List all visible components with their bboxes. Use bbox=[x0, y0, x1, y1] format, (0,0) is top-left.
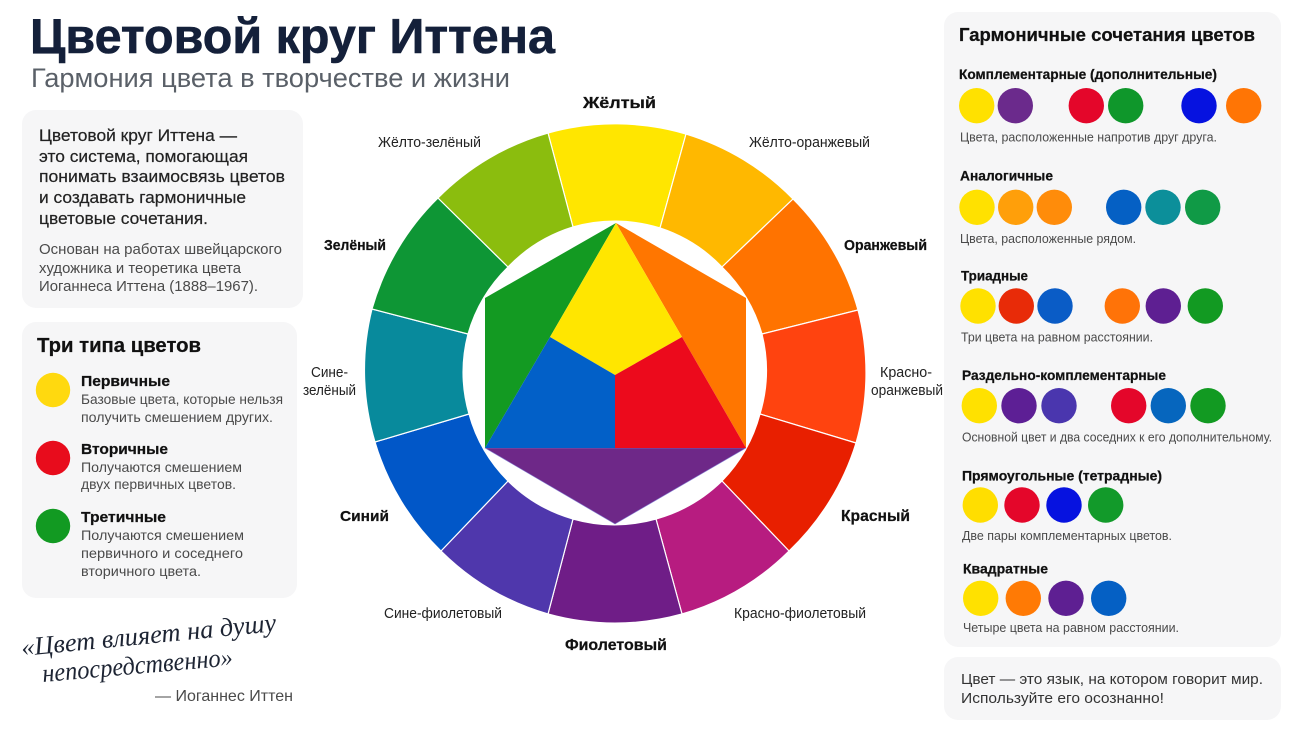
icon: primary dot bbox=[36, 373, 70, 407]
split-complementary scheme: Основной цвет и два соседних к его дополнительному. bbox=[962, 430, 1272, 445]
shape: orange secondary bbox=[616, 223, 746, 448]
label: red-orange: оранжевый bbox=[871, 383, 943, 399]
segment: blue-green bbox=[364, 309, 469, 442]
primary colours text bbox=[81, 373, 283, 425]
shape: blue primary bbox=[485, 337, 615, 448]
label: blue-green: зелёный bbox=[303, 383, 356, 399]
quote: непосредственно» bbox=[41, 642, 234, 688]
square scheme: Квадратные bbox=[963, 560, 1048, 576]
label: orange: Оранжевый bbox=[844, 238, 927, 254]
panel: harmonious combinations bbox=[944, 12, 1281, 647]
tertiary colours text: Третичные bbox=[81, 509, 166, 526]
split-complementary scheme: Раздельно-комплементарные bbox=[962, 367, 1166, 383]
label: yellow-orange: Жёлто-оранжевый bbox=[749, 135, 870, 151]
triadic scheme: Триадные bbox=[961, 268, 1028, 284]
intro secondary text: художника и теоретика цвета bbox=[39, 261, 242, 277]
primary colours text: Базовые цвета, которые нельзя bbox=[81, 391, 283, 407]
label: yellow: Жёлтый bbox=[582, 95, 656, 112]
tertiary colours text: вторичного цвета. bbox=[81, 563, 201, 579]
label: blue-green: Сине- bbox=[311, 365, 348, 381]
segment: blue-violet bbox=[441, 481, 573, 614]
intro lead text: понимать взаимосвязь цветов bbox=[39, 168, 285, 186]
segment: red-orange bbox=[760, 310, 866, 443]
secondary colours text: Получаются смешением bbox=[81, 459, 242, 475]
heading: three types: Три типа цветов bbox=[37, 334, 201, 357]
secondary colours text bbox=[81, 441, 242, 492]
tetradic scheme bbox=[962, 468, 1172, 543]
shape: violet secondary bbox=[485, 448, 746, 524]
closing text bbox=[961, 671, 1263, 707]
subtitle: Гармония цвета в творчестве и жизни bbox=[31, 63, 510, 93]
square scheme bbox=[963, 560, 1179, 635]
label: red: Красный bbox=[841, 508, 910, 525]
complementary scheme: Цвета, расположенные напротив друг друга. bbox=[960, 130, 1217, 144]
analogous scheme: Аналогичные bbox=[960, 168, 1053, 184]
heading: combinations: Гармоничные сочетания цветов bbox=[959, 24, 1255, 45]
intro lead text: это система, помогающая bbox=[39, 148, 248, 166]
icon: secondary dot bbox=[36, 441, 70, 475]
label: blue: Синий bbox=[340, 508, 389, 525]
shape: yellow primary bbox=[550, 223, 682, 375]
shape: green secondary bbox=[485, 223, 616, 448]
tertiary colours text bbox=[81, 509, 244, 579]
colour wheel: 12-part ring bbox=[364, 124, 866, 623]
segment: green bbox=[372, 198, 508, 334]
tertiary colours text: первичного и соседнего bbox=[81, 545, 243, 561]
wheel labels bbox=[303, 95, 943, 654]
segment: red-violet bbox=[656, 481, 789, 614]
colour wheel: central triangles and hexagon bbox=[485, 223, 746, 524]
tetradic scheme: Две пары комплементарных цветов. bbox=[962, 528, 1172, 543]
title: Цветовой круг Иттена bbox=[30, 10, 556, 64]
segment: orange bbox=[722, 199, 858, 334]
quote attribution: — Иоганнес Иттен bbox=[155, 688, 293, 705]
segment: yellow-orange bbox=[660, 134, 793, 267]
label: red-violet: Красно-фиолетовый bbox=[734, 606, 866, 622]
triadic scheme bbox=[960, 268, 1223, 345]
analogous scheme bbox=[959, 168, 1220, 246]
tertiary colours text: Получаются смешением bbox=[81, 527, 244, 543]
label: red-orange: Красно- bbox=[880, 365, 932, 381]
tetradic scheme: Прямоугольные (тетрадные) bbox=[962, 468, 1162, 484]
segment: violet bbox=[548, 519, 682, 623]
segment: blue bbox=[375, 414, 508, 551]
intro lead text: и создавать гармоничные bbox=[39, 189, 246, 207]
split-complementary scheme bbox=[962, 367, 1272, 445]
icon: tertiary dot bbox=[36, 509, 70, 543]
intro secondary text: Основан на работах швейцарского bbox=[39, 242, 282, 258]
label: green: Зелёный bbox=[324, 238, 386, 254]
panel: closing note bbox=[944, 657, 1281, 720]
segment: red bbox=[722, 414, 856, 551]
label: red-orange bbox=[871, 365, 943, 399]
panel: three colour types bbox=[22, 322, 297, 598]
intro lead text bbox=[39, 127, 285, 228]
intro lead text: цветовые сочетания. bbox=[39, 210, 208, 228]
label: blue-violet: Сине-фиолетовый bbox=[384, 606, 502, 622]
quote bbox=[20, 608, 293, 705]
secondary colours text: Вторичные bbox=[81, 441, 168, 458]
intro secondary text: Иоганнеса Иттена (1888–1967). bbox=[39, 279, 258, 295]
intro lead text: Цветовой круг Иттена — bbox=[39, 127, 238, 145]
shape: red primary bbox=[615, 337, 746, 448]
segment: yellow bbox=[548, 124, 686, 228]
complementary scheme bbox=[959, 66, 1261, 144]
label: violet: Фиолетовый bbox=[565, 637, 667, 654]
quote: «Цвет влияет на душу bbox=[20, 608, 278, 662]
intro secondary text bbox=[39, 242, 282, 295]
panel: intro bbox=[22, 110, 303, 308]
label: blue-green bbox=[303, 365, 356, 399]
triadic scheme: Три цвета на равном расстоянии. bbox=[961, 330, 1153, 345]
closing text: Цвет — это язык, на котором говорит мир. bbox=[961, 671, 1263, 688]
analogous scheme: Цвета, расположенные рядом. bbox=[960, 231, 1136, 246]
segment: yellow-green bbox=[438, 133, 573, 267]
primary colours text: получить смешением других. bbox=[81, 409, 273, 425]
complementary scheme: Комплементарные (дополнительные) bbox=[959, 66, 1217, 82]
square scheme: Четыре цвета на равном расстоянии. bbox=[963, 620, 1179, 635]
primary colours text: Первичные bbox=[81, 373, 170, 390]
label: yellow-green: Жёлто-зелёный bbox=[378, 135, 481, 151]
secondary colours text: двух первичных цветов. bbox=[81, 476, 236, 492]
closing text: Используйте его осознанно! bbox=[961, 690, 1164, 707]
